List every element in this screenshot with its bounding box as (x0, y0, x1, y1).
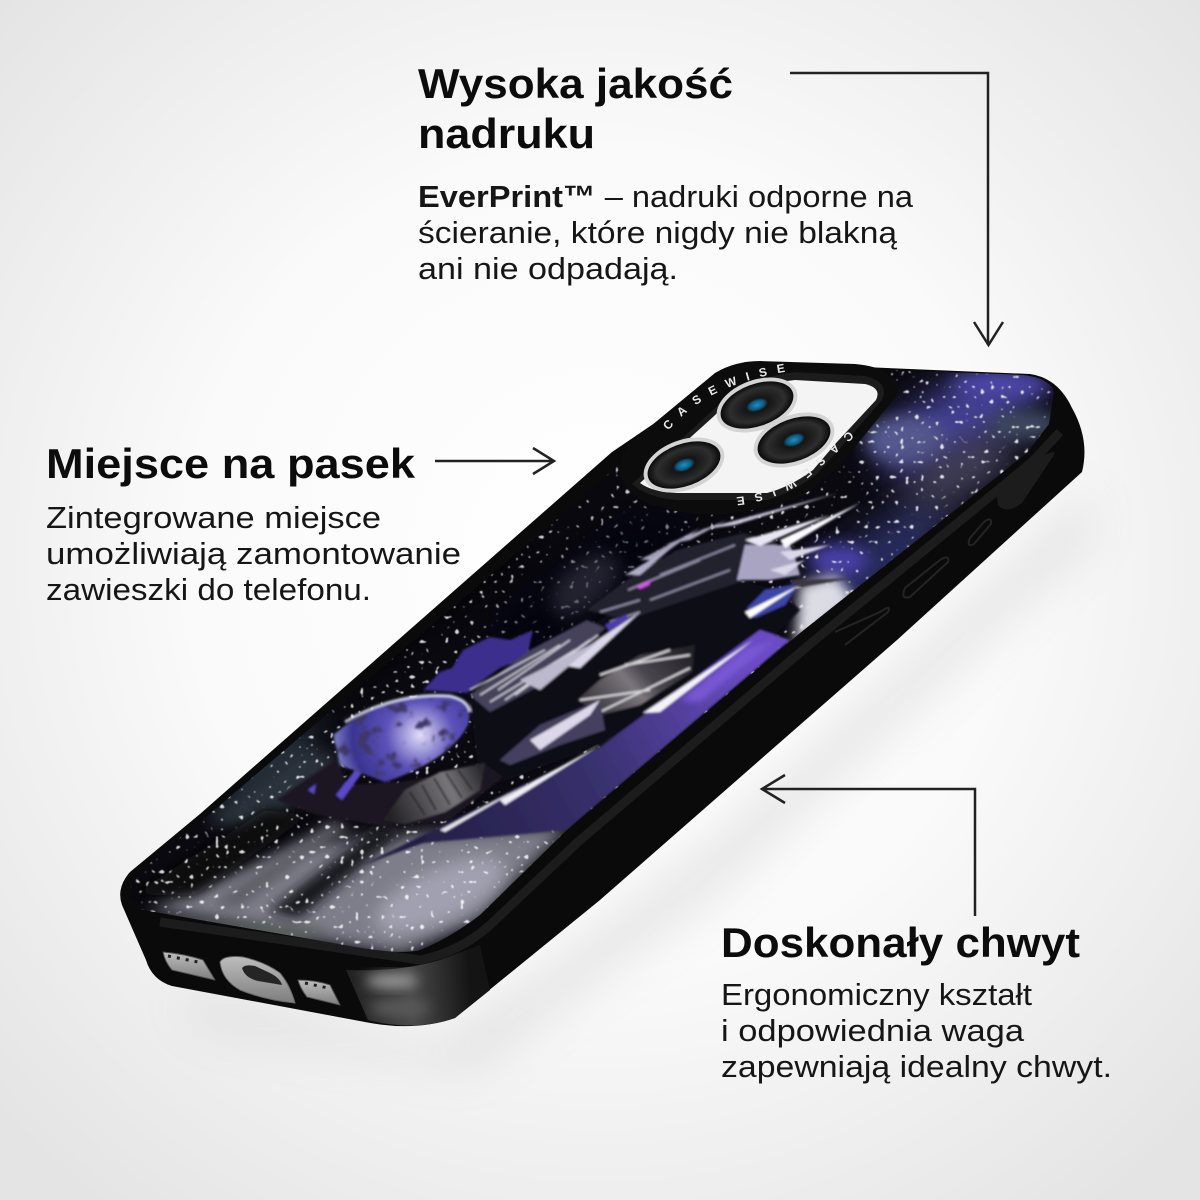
armor highlights (580, 650, 690, 712)
bump inner rim (632, 372, 884, 500)
right speaker (298, 980, 340, 1005)
body text: strap slot: umożliwiają zamontowanie (46, 536, 461, 571)
purple claw (423, 630, 533, 693)
planet (332, 692, 474, 784)
case side band (160, 432, 1060, 960)
body text: strap slot: zawieszki do telefonu. (46, 572, 371, 607)
dragon claw mass (277, 760, 503, 826)
bright wing patch (680, 644, 766, 704)
heading: print quality (418, 60, 733, 157)
side buttons (835, 519, 991, 645)
heading: strap slot: Miejsce na pasek (46, 440, 416, 487)
body text: print quality: EverPrint™ – nadruki odporne na (418, 179, 914, 214)
neck scale lines (470, 635, 598, 702)
lilac mane (737, 545, 800, 580)
body text: grip: zapewniają idealny chwyt. (721, 1049, 1112, 1084)
body text: strap slot: Zintegrowane miejsce (46, 500, 381, 535)
snout hollow (605, 615, 630, 632)
bump outer frame (619, 361, 898, 515)
body text: strap slot (46, 500, 461, 607)
ring text top: CASEWISE (664, 364, 785, 429)
action switch (996, 452, 1055, 510)
body text: grip (721, 977, 1112, 1084)
dragon body (470, 570, 800, 790)
lens right (746, 402, 842, 478)
lower grey clouds (140, 703, 570, 955)
spikes (440, 493, 860, 832)
neck scales (470, 620, 605, 712)
ring text bottom: CASEWISE (736, 432, 853, 506)
body text: grip: Ergonomiczny kształt (721, 977, 1032, 1012)
heading: print quality: Wysoka jakość (418, 60, 733, 107)
dragon eye (637, 580, 651, 589)
arrow: strap slot (435, 448, 554, 474)
dragon arm (383, 763, 485, 824)
dim overlay over middle stars (480, 510, 720, 680)
upper nebula (793, 372, 1054, 616)
phone case (120, 361, 1084, 1026)
lower limb (500, 700, 605, 765)
arm ribs (410, 770, 472, 815)
body text: print quality: ścieranie, które nigdy nie blakną (418, 215, 898, 250)
body text: grip: i odpowiednia waga (721, 1013, 1025, 1048)
dragon (277, 493, 860, 865)
bottom corner highlight (346, 945, 490, 1026)
arrow: grip (762, 775, 975, 916)
chest armor (577, 645, 695, 715)
mid nebula (548, 550, 622, 620)
heading: print quality: nadruku (418, 110, 595, 157)
left speaker (163, 952, 215, 980)
purple streaks on claw (306, 769, 363, 802)
arrow: print quality (790, 73, 1003, 345)
heading: grip: Doskonały chwyt (721, 919, 1080, 966)
star field (120, 360, 1070, 960)
dark streaks (132, 525, 540, 918)
charging port (220, 957, 295, 1003)
head streaks (600, 545, 735, 622)
purple wing (363, 630, 790, 865)
body text: print quality: ani nie odpadają. (418, 251, 678, 286)
callout: strap slot (46, 440, 461, 607)
case body silhouette (120, 362, 1084, 1026)
white camera plate (640, 380, 878, 493)
dragon head (587, 533, 777, 620)
callout: print quality (418, 60, 914, 286)
body text: print quality (418, 179, 914, 286)
phone shadow (180, 490, 1090, 1070)
blue wing eye (747, 583, 800, 618)
printed back artwork (120, 346, 1070, 960)
lens left (636, 427, 732, 503)
camera bump (624, 361, 898, 514)
lens top (709, 367, 805, 443)
moon glow (795, 575, 855, 650)
callout: grip (721, 919, 1112, 1084)
